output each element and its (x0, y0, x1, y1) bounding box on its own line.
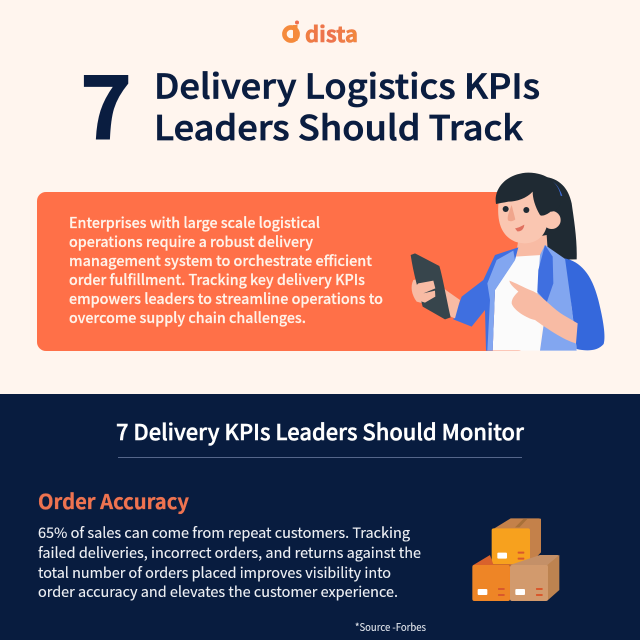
logo: dista: dista (305, 19, 358, 49)
intro text block: overcome supply chain challenges. (69, 307, 306, 328)
intro text block: empowers leaders to streamline operations to (69, 288, 383, 309)
section heading: 7 Delivery KPIs Leaders Should Monitor (116, 415, 525, 447)
KPI description text (38, 522, 421, 602)
intro text block (69, 212, 383, 328)
intro text block: management system to orchestrate efficient (69, 250, 372, 271)
title: Delivery Logistics KPIs (154, 60, 540, 108)
intro text block: order fulfillment. Tracking key delivery KPIs (69, 269, 365, 290)
source note: *Source -Forbes (355, 620, 426, 635)
KPI description text: total number of orders placed improves visibility into (38, 562, 391, 583)
panel: intro (37, 192, 527, 351)
KPI description text: failed deliveries, incorrect orders, and returns against the (38, 542, 421, 563)
KPI description text: 65% of sales can come from repeat customers. Tracking (38, 522, 410, 543)
title number 7: 7 (80, 38, 132, 165)
KPI heading: Order Accuracy: Order Accuracy (38, 485, 189, 515)
title: Leaders Should Track (154, 101, 523, 150)
intro text block: operations require a robust delivery (69, 231, 313, 252)
panel: KPI section background (0, 394, 640, 640)
intro text block: Enterprises with large scale logistical (69, 212, 320, 233)
logo: dista (284, 19, 358, 49)
title (154, 60, 540, 150)
illustration: woman holding phone (411, 173, 605, 351)
KPI description text: order accuracy and elevates the customer experience. (38, 581, 398, 602)
icon: stacked boxes (472, 518, 559, 601)
